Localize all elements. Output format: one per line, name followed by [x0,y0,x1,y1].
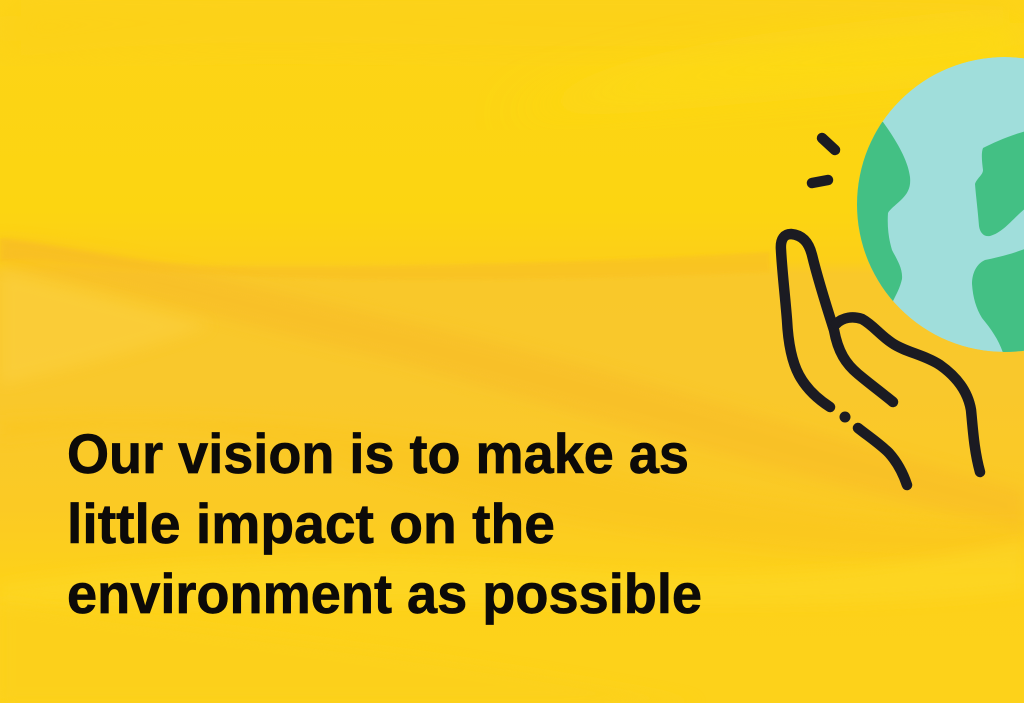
heading line 1: Our vision is to make as [67,422,689,485]
hand: gap dot [840,412,850,422]
motion tick lower [812,180,828,183]
hand: finger outline [836,317,980,472]
hand: thumb and palm line [781,234,893,407]
globe ocean [857,57,1024,352]
land: left continent [857,122,910,301]
heading line 3: environment as possible [67,562,702,625]
icon: hand holding globe [781,138,980,485]
land: lower right continent [972,247,1024,356]
heading line 2: little impact on the [67,492,555,555]
land: upper right continent [975,130,1024,236]
hand: wrist line [858,428,907,485]
heading text [67,422,702,625]
icon: globe [850,57,1024,356]
motion tick upper [822,138,835,150]
